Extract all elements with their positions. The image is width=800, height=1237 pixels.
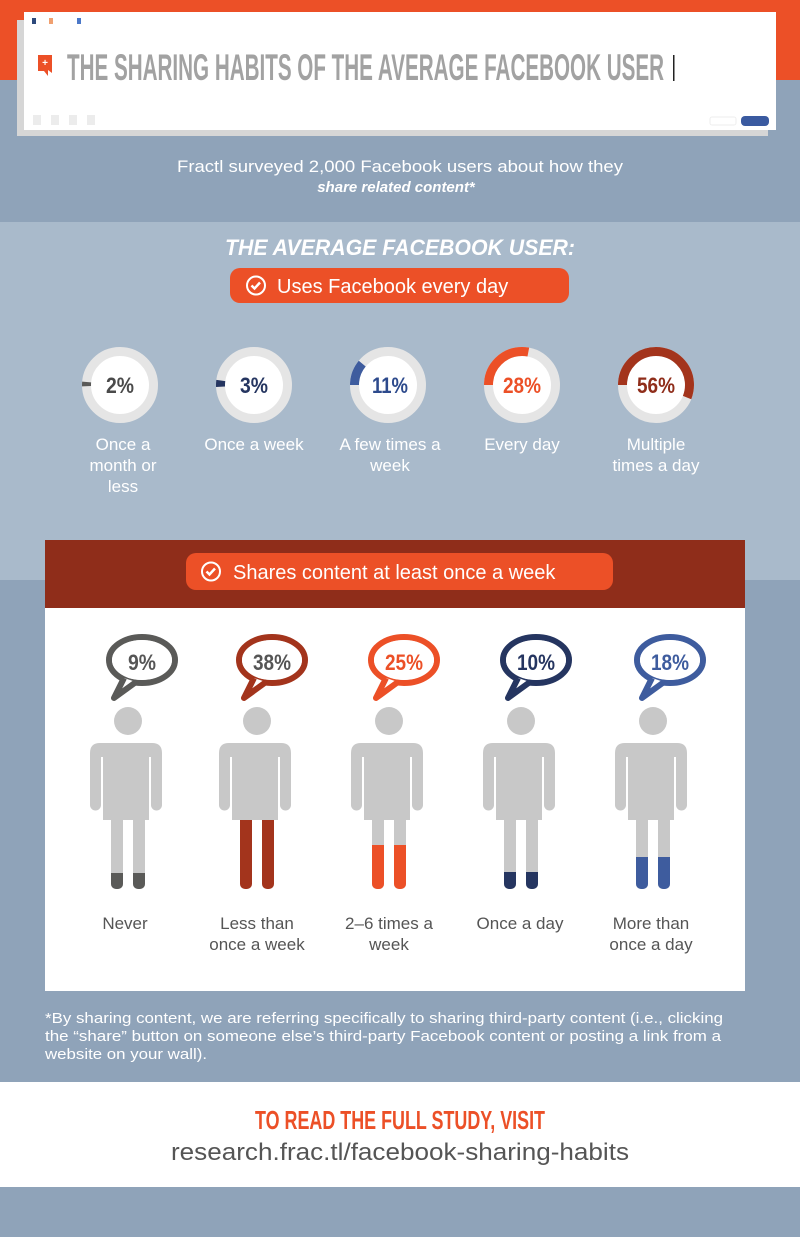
figure: once a day 10%: 10% (517, 650, 555, 675)
donut chart: 28% every day: Every day (484, 435, 560, 454)
figure: 2-6 times a week 25% (345, 637, 437, 954)
donut chart: 2% once a month or less: 2% (106, 373, 134, 398)
figure: less than once a week 38%: once a week (209, 935, 305, 954)
header card (17, 12, 776, 136)
icon: red bookmark plus (38, 55, 52, 76)
intro text (177, 157, 624, 196)
figure: never 9% (90, 637, 175, 933)
figure: 2-6 times a week 25%: 2–6 times a (345, 914, 433, 933)
figure: once a day 10% (477, 637, 569, 933)
pill: shares content at least once a week (186, 553, 613, 590)
figure: once a day 10%: Once a day (477, 914, 564, 933)
heading: the average facebook user: THE AVERAGE FACEBOOK USER: (225, 235, 575, 260)
call to action heading: TO READ THE FULL STUDY, VISIT (255, 1105, 545, 1135)
donut chart: 56% multiple times a day: times a day (613, 456, 700, 475)
footnote (44, 1010, 723, 1063)
figure: more than once a day 18%: 18% (651, 650, 689, 675)
intro text: share related content* (317, 179, 476, 196)
figure: never 9%: 9% (128, 650, 156, 675)
donut chart: 2% once a month or less: less (108, 477, 138, 496)
pill: shares content at least once a week: Shares content at least once a week (233, 562, 556, 584)
donut chart: 11% a few times a week: week (369, 456, 410, 475)
pill: uses facebook every day: Uses Facebook every day (277, 276, 508, 298)
icon: red bookmark plus: + (42, 58, 48, 69)
donut chart: 56% multiple times a day (613, 352, 700, 475)
donut chart: 2% once a month or less: Once a (96, 435, 151, 454)
donut chart: 3% once a week (204, 350, 304, 454)
donut chart: 11% a few times a week (339, 352, 441, 475)
figure: 2-6 times a week 25%: 25% (385, 650, 423, 675)
pill: uses facebook every day (230, 268, 569, 303)
donut chart: 56% multiple times a day: Multiple (627, 435, 685, 454)
donut chart: 28% every day (484, 352, 560, 454)
donut chart: 2% once a month or less (85, 350, 157, 496)
donut chart: 56% multiple times a day: 56% (637, 373, 675, 398)
donut chart: 11% a few times a week: A few times a (339, 435, 441, 454)
figure: never 9%: Never (102, 914, 148, 933)
footnote: *By sharing content, we are referring specifically to sharing third-party content (i.e., clicking (45, 1010, 723, 1027)
donut chart: 2% once a month or less: month or (89, 456, 157, 475)
figure: less than once a week 38%: 38% (253, 650, 291, 675)
figure: less than once a week 38% (209, 637, 305, 954)
donut chart: 11% a few times a week: 11% (372, 373, 408, 398)
intro text: Fractl surveyed 2,000 Facebook users about how they (177, 157, 624, 176)
figure: 2-6 times a week 25%: week (368, 935, 409, 954)
figure: more than once a day 18%: More than (613, 914, 689, 933)
donut chart: 3% once a week: 3% (240, 373, 268, 398)
donut chart: 28% every day: 28% (503, 373, 541, 398)
figure: more than once a day 18% (609, 637, 703, 954)
figure: more than once a day 18%: once a day (609, 935, 693, 954)
panel: sharing frequency (45, 540, 745, 991)
footnote: website on your wall). (44, 1046, 207, 1063)
footnote: the “share” button on someone else’s third-party Facebook content or posting a link from a (45, 1028, 722, 1045)
url: research.frac.tl/facebook-sharing-habits (171, 1139, 629, 1166)
donut chart: 3% once a week: Once a week (204, 435, 304, 454)
figure: less than once a week 38%: Less than (220, 914, 294, 933)
